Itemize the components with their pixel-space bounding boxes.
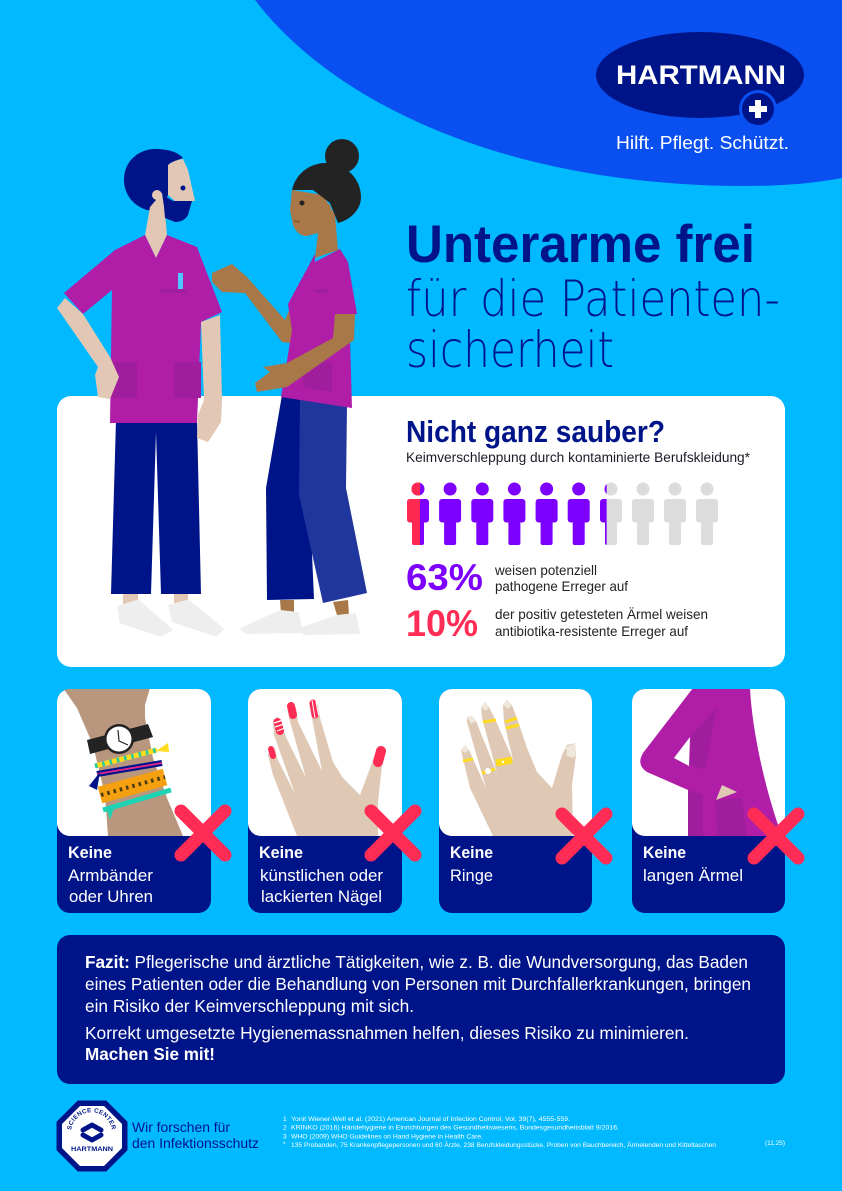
panel: white statistics (57, 396, 785, 667)
footnotes: KRINKO (2016) Händehygiene in Einrichtungen des Gesundheitswesens, Bundesgesundheitsblatt 9/2016. (291, 1124, 619, 1132)
logo: Hartmann: HARTMANN (616, 60, 786, 90)
panel: Fazit: Machen Sie mit! (85, 1044, 215, 1064)
footnotes: 135 Probanden, 75 Krankenpflegepersonen und 60 Ärzte, 238 Berufskleidungsstücke, Proben von Bauchbereich, Ärmelenden und Kitteltaschen (291, 1141, 716, 1149)
panel: Fazit: Fazit: Pflegerische und ärztliche Tätigkeiten, wie z. B. die Wundversorgung, das Baden (85, 952, 748, 972)
title: für die Patienten- (406, 270, 780, 328)
tagline: research (132, 1120, 259, 1151)
card: lange Ärmel (632, 688, 798, 913)
tagline: research: Wir forschen für (132, 1120, 231, 1135)
blue header curve (255, 0, 842, 186)
statistic: 10% (406, 603, 708, 644)
card text: Keine (643, 844, 686, 862)
icon: red cross (371, 811, 415, 855)
card: Armbänder oder Uhren (57, 688, 225, 913)
card text (68, 844, 153, 906)
subheading: Keimverschleppung durch kontaminierte Berufskleidung* (406, 450, 751, 465)
panel: Fazit (57, 935, 785, 1084)
tagline: research: den Infektionsschutz (132, 1136, 259, 1151)
icon: long sleeve (640, 688, 782, 836)
logo: Hartmann: Hilft. Pflegt. Schützt. (616, 133, 789, 153)
card text: lackierten Nägel (261, 887, 382, 906)
title: sicherheit (406, 321, 614, 379)
card text: langen Ärmel (643, 866, 743, 885)
card text: Ringe (450, 866, 493, 885)
footnotes: 2 (283, 1124, 287, 1132)
card: künstliche Nägel (248, 689, 415, 913)
footnotes: Yonit Wiener-Well et al. (2021) American Journal of Infection Control, Vol. 39(7), 4555-559. (291, 1116, 570, 1123)
illustration: female nurse (212, 139, 367, 634)
card text (259, 844, 383, 906)
icon: red cross (562, 814, 606, 858)
panel: Fazit: eines Patienten oder die Behandlung von Personen mit Durchfallerkrankungen, bringen (85, 974, 751, 994)
statistic: 63%: pathogene Erreger auf (495, 578, 628, 594)
footnotes (283, 1116, 785, 1149)
logo: Science Center: HARTMANN (71, 1146, 113, 1153)
icon: hand with painted nails (268, 699, 385, 836)
chart: people pictogram (407, 482, 718, 545)
illustration: male nurse (57, 149, 222, 635)
card text: künstlichen oder (260, 866, 383, 885)
statistic: 10%: 10% (406, 603, 478, 644)
card text: oder Uhren (69, 887, 153, 906)
card text: Armbänder (68, 866, 153, 885)
heading: Nicht ganz sauber: Nicht ganz sauber? (406, 414, 665, 449)
title: Unterarme frei (406, 215, 755, 274)
logo: Hartmann (596, 32, 804, 153)
card text: Keine (450, 844, 493, 862)
icon: hand with rings (461, 700, 576, 836)
icon: red cross (754, 814, 798, 858)
card text: Keine (68, 844, 112, 862)
logo: Science Center (56, 1100, 128, 1172)
footnotes: 3 (283, 1134, 287, 1140)
card: Ringe (439, 689, 606, 913)
card text (643, 844, 743, 885)
panel: Fazit: ein Risiko der Keimverschleppung mit sich. (85, 996, 414, 1016)
icon: wrist with watch and bracelets (63, 688, 183, 836)
footnotes: 1 (283, 1116, 287, 1123)
logo: Science Center: SCIENCE CENTER (67, 1108, 116, 1130)
footnotes: * (283, 1141, 286, 1148)
statistic: 63%: 63% (406, 557, 483, 598)
statistic: 10%: der positiv getesteten Ärmel weisen (495, 606, 708, 622)
icon: red cross (181, 811, 225, 855)
title (406, 215, 780, 379)
statistic: 63%: weisen potenziell (494, 562, 597, 578)
footnotes: WHO (2009) WHO Guidelines on Hand Hygiene in Health Care. (291, 1134, 483, 1140)
card text: Keine (259, 844, 303, 862)
statistic: 10%: antibiotika-resistente Erreger auf (495, 623, 688, 639)
statistic: 63% (406, 557, 628, 598)
footnotes: (11.25) (765, 1140, 785, 1147)
card text (450, 844, 493, 885)
panel: Fazit: Korrekt umgesetzte Hygienemassnahmen helfen, dieses Risiko zu minimieren. (85, 1023, 689, 1043)
